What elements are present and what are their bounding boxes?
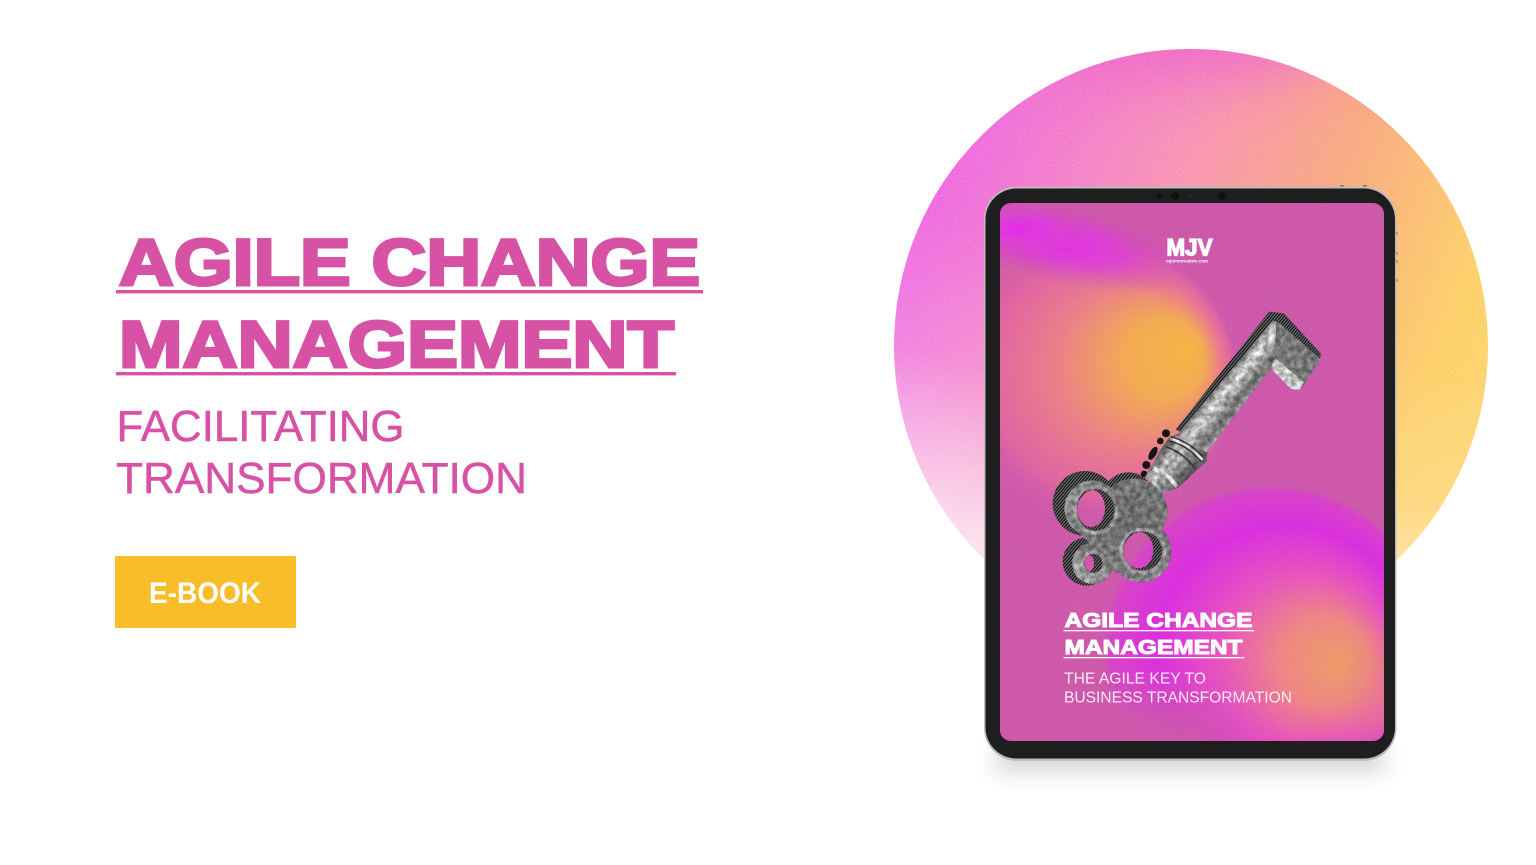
- key metal body: [1064, 320, 1321, 584]
- subtitle: Facilitating Transformation: TRANSFORMATION: [116, 454, 527, 503]
- button: E-book: [115, 556, 296, 628]
- key head face: [1064, 478, 1171, 584]
- cover logo: MJV: MJV: [1166, 234, 1212, 262]
- key hole inner shadows: [1077, 489, 1162, 573]
- subtitle: Facilitating Transformation: [116, 402, 527, 503]
- cover subtitle: BUSINESS TRANSFORMATION: [1064, 690, 1292, 706]
- tablet bezel: [986, 188, 1395, 758]
- tablet cameras: [1156, 192, 1226, 200]
- tablet frame: [984, 186, 1396, 761]
- key shaft hatched edge: [1176, 312, 1321, 434]
- key bit top: [1271, 321, 1321, 390]
- tablet screen: ebook cover: [1000, 203, 1384, 741]
- key bit lower face: [1271, 358, 1304, 390]
- cover subtitle: THE AGILE KEY TO: [1064, 670, 1206, 688]
- cover title: MANAGEMENT: [1064, 636, 1243, 659]
- cover title: [1064, 609, 1254, 659]
- tablet device: [984, 185, 1398, 761]
- key collar beads: [1141, 429, 1170, 477]
- key head back edge: [1053, 471, 1154, 586]
- key hole rims: [1075, 487, 1164, 575]
- title: Agile Change Management: [116, 225, 703, 381]
- cover title: AGILE CHANGE: [1064, 609, 1252, 632]
- key shaft: [1178, 320, 1281, 454]
- tablet shadow: [995, 748, 1385, 772]
- button: E-book: E-BOOK: [149, 577, 261, 610]
- cover subtitle: [1064, 670, 1292, 706]
- subtitle: Facilitating Transformation: FACILITATING: [116, 402, 404, 451]
- key collar rings: [1170, 439, 1203, 460]
- title: Agile Change Management: MANAGEMENT: [119, 307, 674, 381]
- cover logo: MJV: mjvinnovation.com: [1166, 258, 1208, 264]
- key neck and collar: [1145, 433, 1207, 494]
- cover illustration: antique key: [1053, 312, 1321, 586]
- gradient circle backdrop: [894, 49, 1488, 560]
- title: Agile Change Management: AGILE CHANGE: [119, 225, 700, 299]
- tablet side buttons: [1340, 185, 1398, 282]
